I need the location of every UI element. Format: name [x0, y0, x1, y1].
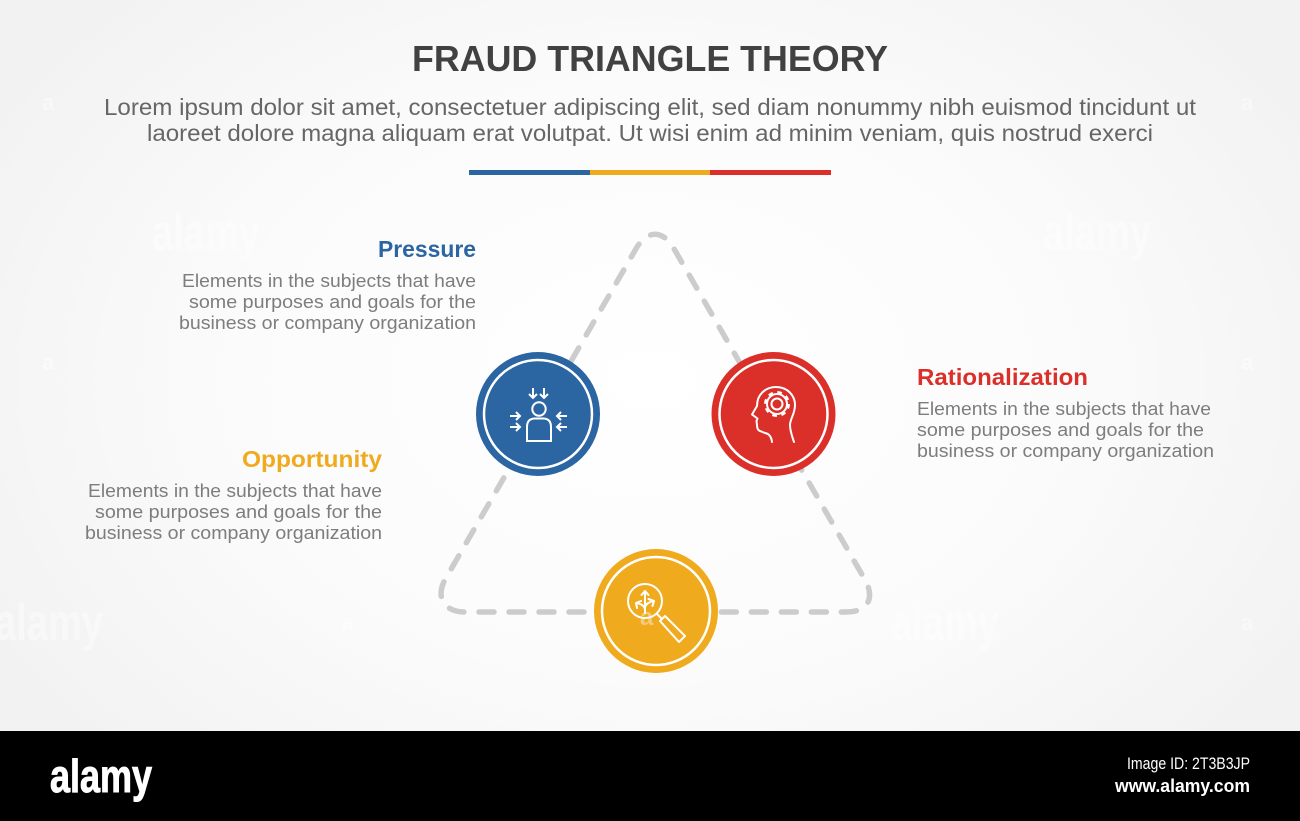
icon: person under pressure: [510, 388, 567, 441]
icon: head with gear: [752, 387, 795, 442]
watermarks: a: [1241, 350, 1254, 375]
website: www.alamy.com: [1114, 776, 1250, 796]
image id: Image ID: 2T3B3JP: [1127, 754, 1250, 773]
label: pressure: Elements in the subjects that have: [182, 271, 476, 291]
watermark letter: a: [640, 604, 654, 631]
watermarks: a: [42, 350, 55, 375]
label: opportunity: Elements in the subjects that have: [88, 481, 382, 501]
label: rationalization: Rationalization: [917, 364, 1088, 390]
watermarks: a: [42, 90, 55, 115]
subtitle text: Lorem ipsum dolor sit amet, consectetuer adipiscing elit, sed diam nonummy nibh euismod tincidunt ut: [104, 94, 1197, 120]
label: rationalization: business or company organization: [917, 441, 1214, 461]
node: rationalization: [712, 352, 836, 476]
label: rationalization: [917, 364, 1214, 461]
watermarks: alamy: [152, 204, 260, 262]
label: pressure: business or company organization: [179, 313, 476, 333]
node: opportunity: [594, 549, 718, 673]
node: pressure: [476, 352, 600, 476]
icon: magnifier with arrows: [628, 584, 685, 642]
label: opportunity: some purposes and goals for the: [95, 502, 382, 522]
dashed triangle: [441, 234, 870, 612]
watermarks: a: [1241, 90, 1254, 115]
label: opportunity: business or company organization: [85, 523, 382, 543]
label: rationalization: some purposes and goals for the: [917, 420, 1204, 440]
label: rationalization: Elements in the subjects that have: [917, 399, 1211, 419]
subtitle text: laoreet dolore magna aliquam erat volutpat. Ut wisi enim ad minim veniam, quis nostrud exerci: [147, 120, 1153, 146]
label: opportunity: [85, 446, 382, 543]
watermarks: [0, 90, 1254, 652]
label: opportunity: Opportunity: [242, 446, 382, 472]
footer band: [0, 731, 1300, 821]
watermarks: a: [1241, 610, 1254, 635]
label: pressure: Pressure: [378, 236, 476, 262]
tricolor divider: [469, 170, 831, 175]
label: pressure: some purposes and goals for the: [189, 292, 476, 312]
label: pressure: [179, 236, 476, 333]
watermarks: alamy: [891, 594, 999, 652]
watermarks: alamy: [1043, 204, 1151, 262]
watermarks: a: [341, 610, 354, 635]
title: FRAUD TRIANGLE THEORY: [412, 38, 888, 79]
footer logo: alamy: [50, 750, 152, 802]
subtitle text: [104, 94, 1197, 146]
